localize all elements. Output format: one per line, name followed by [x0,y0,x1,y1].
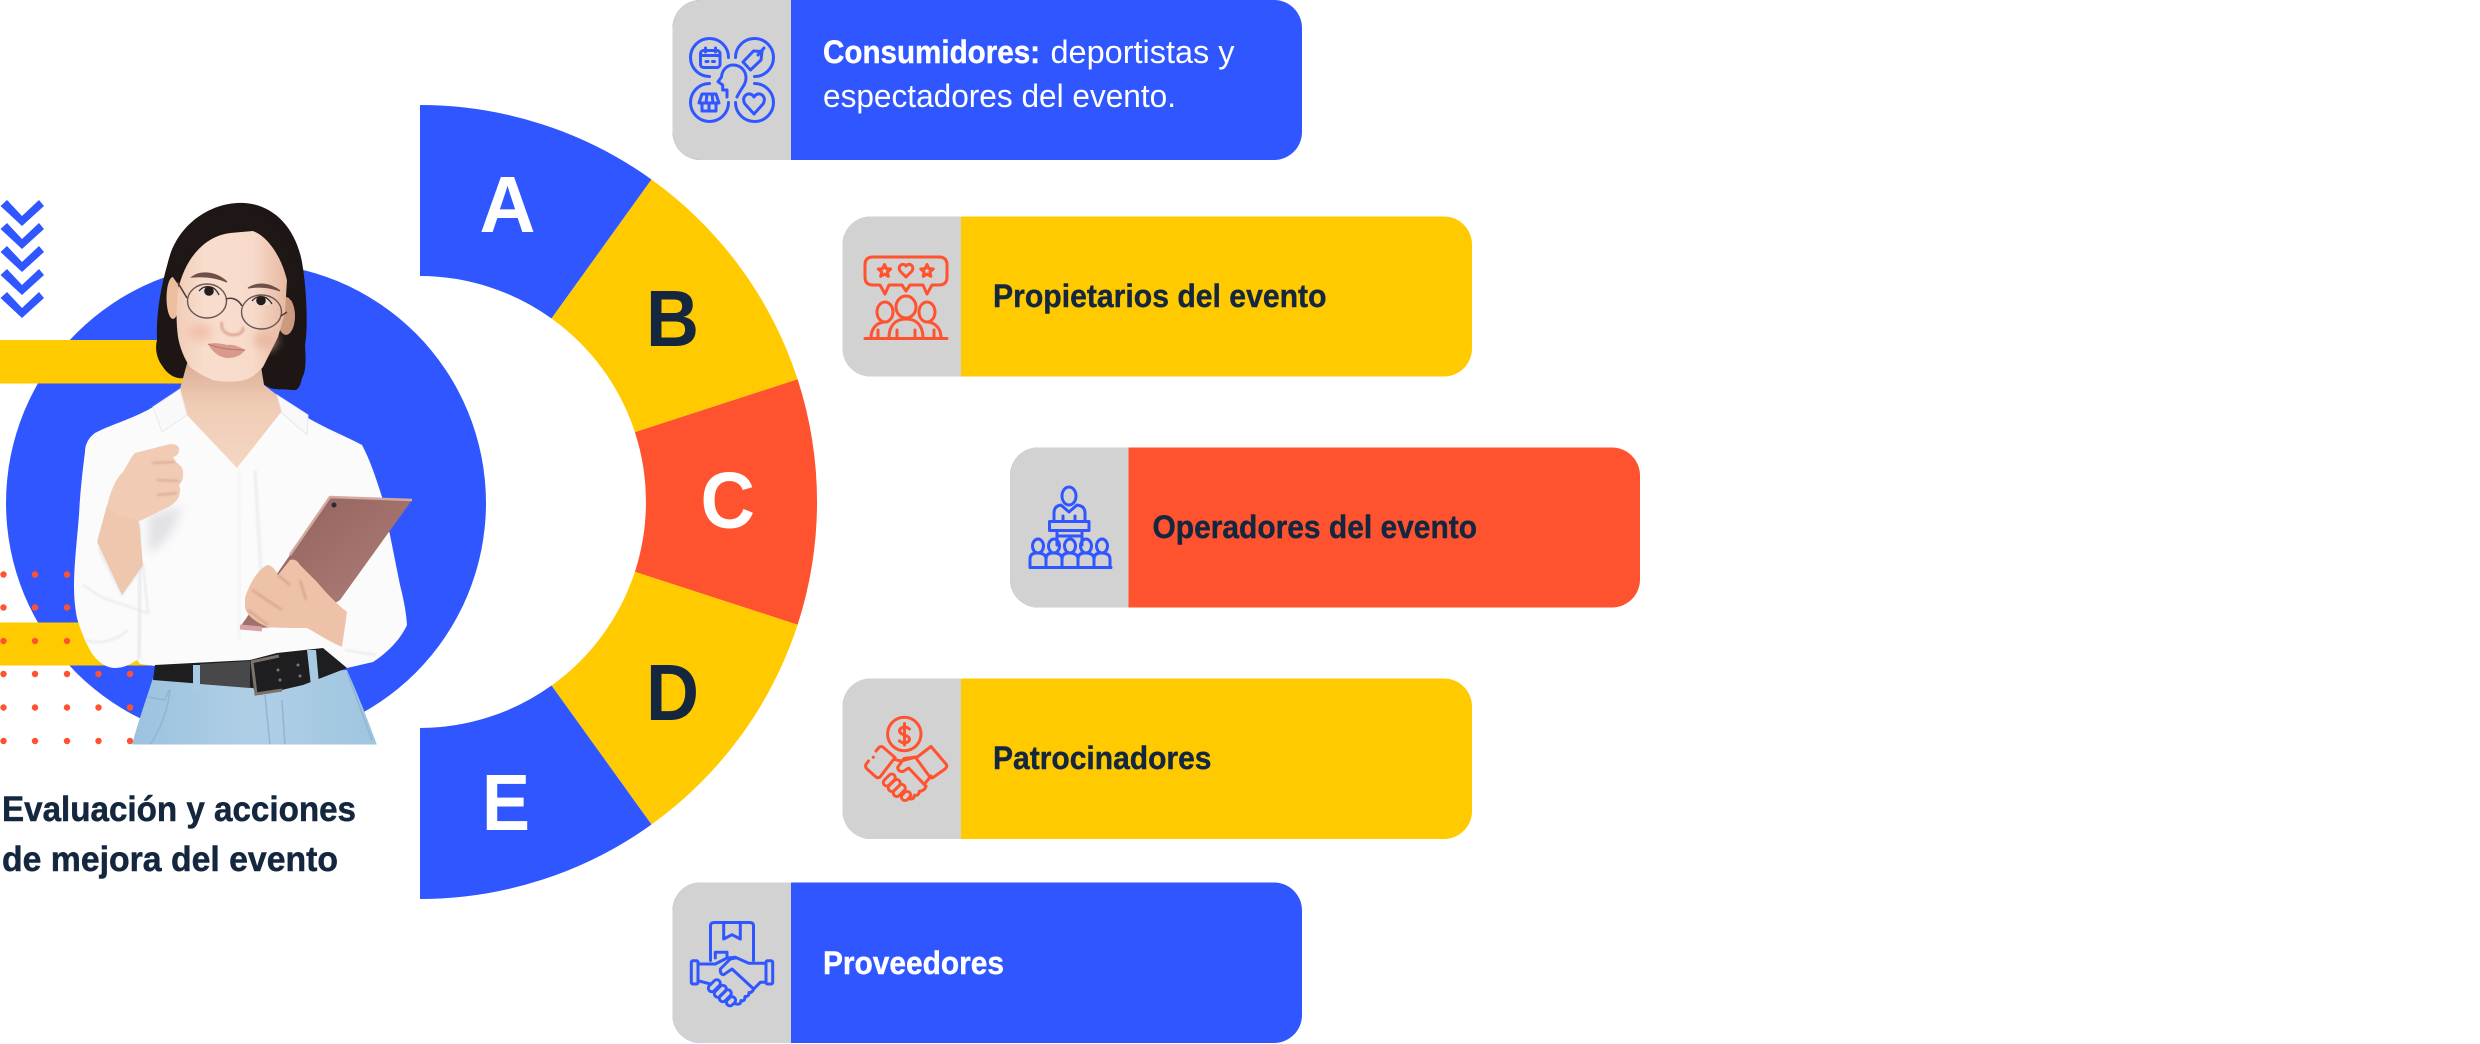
card: consumidores [672,0,1302,160]
photo: woman with tablet [74,203,412,745]
card: proveedores [672,882,1302,1043]
heading: Evaluación y acciones [2,790,356,829]
heading: de mejora del evento [2,840,338,879]
pointing hand [107,444,183,521]
icon: audience rating [865,257,947,338]
card text: Consumidores: [823,34,1040,70]
jeans [132,670,377,745]
belt [153,648,347,695]
hair back [156,203,307,390]
face [176,231,287,382]
card: propietarios [842,216,1472,376]
left ear [166,277,180,319]
collar [153,389,308,435]
icon: speaker at podium [1030,487,1111,568]
tablet hand and forearm [245,560,347,647]
panel: background circle [6,263,486,743]
left forearm [97,505,143,595]
segment D [552,572,798,824]
card text: Patrocinadores [993,740,1212,776]
tablet [240,497,412,629]
card: patrocinadores [842,678,1472,839]
card text: espectadores del evento. [823,78,1176,114]
icon: sponsorship handshake [866,717,947,802]
dot pattern [0,571,133,744]
segment E: E [482,758,530,847]
icon: supplier handshake [691,922,773,1007]
shirt [74,389,407,668]
segment A [420,105,652,318]
heading [2,790,356,879]
segment C [635,379,817,625]
yellow bar: lower [0,622,155,666]
hair front [172,231,291,300]
neck [180,360,282,468]
card text: Propietarios del evento [993,278,1326,314]
yellow bar: upper [0,340,190,384]
chart: semicircular segments A to E [420,105,817,899]
segment B [552,180,798,432]
card text: Proveedores [823,945,1004,981]
segment B: B [646,274,699,363]
icon: consumer [690,38,774,122]
facial features [178,273,287,358]
right ear [280,297,295,335]
card: operadores [1010,448,1640,608]
segment C: C [700,456,755,544]
segment E [420,686,652,899]
card text: deportistas y [1050,34,1234,70]
card text: Operadores del evento [1152,509,1477,545]
segment D: D [646,648,699,737]
icon: chevrons [0,200,44,318]
segment A: A [480,160,536,249]
card text [823,34,1234,114]
